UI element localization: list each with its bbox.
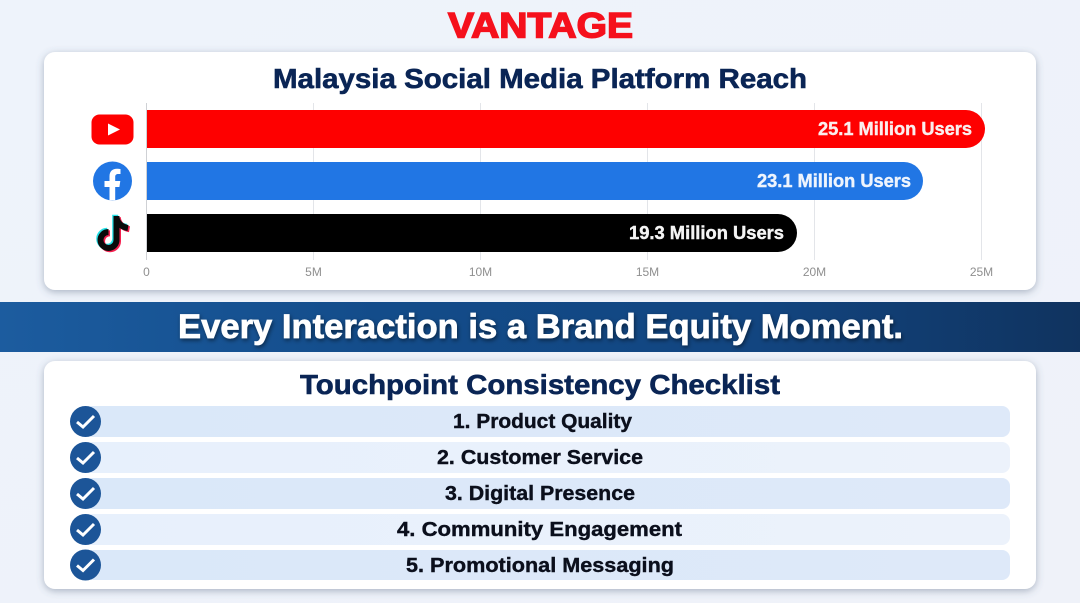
row 1: product quality [70,406,1010,437]
panel: platform reach chart [44,52,1036,290]
icon: Facebook [93,162,132,200]
row 2: customer service [70,442,1010,473]
bar: YouTube 25.1 million [147,110,985,148]
heading: checklist title: Touchpoint Consistency Checklist [300,369,780,400]
logo: VANTAGE: VANTAGE [448,6,633,46]
axis labels: 10M [469,265,492,279]
row 5: promotional messaging: 5. Promotional Messaging [406,554,674,577]
axis labels [143,265,993,279]
heading: chart title: Malaysia Social Media Platform Reach [273,63,807,94]
axis labels: 5M [305,265,322,279]
bar: TikTok 19.3 million [147,214,797,252]
icon: TikTok [99,215,130,249]
axis labels: 0 [143,265,150,279]
axis labels: 25M [970,265,993,279]
row 5: promotional messaging [70,550,1010,580]
banner: brand equity statement: Every Interaction is a Brand Equity Moment. [178,308,903,346]
axis labels: 20M [803,265,826,279]
bar: YouTube 25.1 million: 25.1 Million Users [818,119,972,139]
row 3: digital presence: 3. Digital Presence [445,482,635,505]
axis labels: 15M [636,265,659,279]
row 3: digital presence [70,478,1010,509]
bar: Facebook 23.1 million: 23.1 Million Users [757,171,911,191]
icon: YouTube [92,114,134,144]
bar: TikTok 19.3 million: 19.3 Million Users [629,223,784,243]
row 4: community engagement [70,514,1010,545]
panel: touchpoint checklist [44,361,1036,589]
row 2: customer service: 2. Customer Service [437,446,643,469]
row 4: community engagement: 4. Community Engagement [397,518,682,541]
banner: brand equity statement [0,302,1080,352]
row 1: product quality: 1. Product Quality [453,410,633,433]
bar: Facebook 23.1 million [147,162,923,200]
